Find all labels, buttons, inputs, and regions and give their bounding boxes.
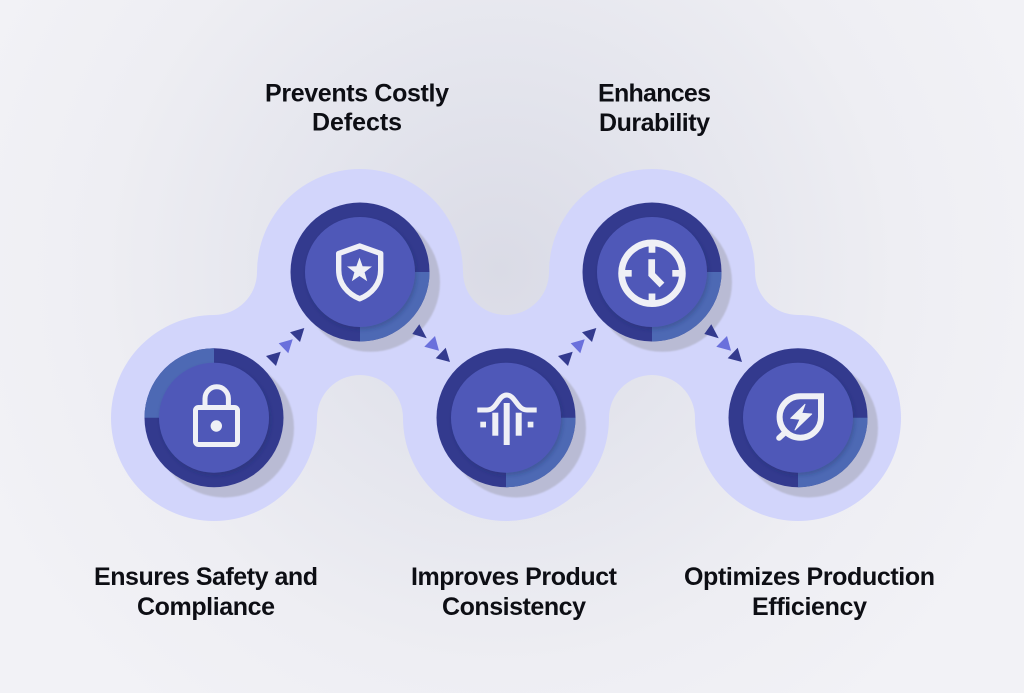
label: Ensures Safety and Compliance: Ensures Safety and: [94, 563, 318, 591]
label: Improves Product Consistency: [411, 563, 618, 621]
label: Prevents Costly Defects: [265, 80, 449, 136]
label: Enhances Durability: [598, 80, 711, 137]
icon: leaf with bolt: [779, 396, 821, 438]
label: Ensures Safety and Compliance: Compliance: [137, 593, 275, 621]
label: Enhances Durability: Enhances: [598, 80, 711, 108]
node 4: durability: [582, 202, 732, 352]
arrow: node 4 to node 5: [704, 324, 742, 362]
label: Optimizes Production Efficiency: Efficiency: [752, 593, 867, 621]
label: Optimizes Production Efficiency: Optimizes Production: [684, 563, 935, 591]
connected blob background: [111, 169, 901, 521]
node 5: production efficiency: [728, 348, 878, 498]
node 3: product consistency: [436, 348, 586, 498]
icon: clock: [622, 243, 682, 304]
icon: shield with star: [339, 246, 381, 299]
label: Optimizes Production Efficiency: [684, 563, 935, 621]
arrow: node 1 to node 2: [266, 328, 304, 366]
label: Prevents Costly Defects: Prevents Costly: [265, 80, 449, 108]
label: Enhances Durability: Durability: [599, 109, 710, 137]
node 2: prevents defects: [290, 202, 440, 352]
label: Ensures Safety and Compliance: [94, 563, 318, 621]
icon: padlock: [196, 387, 238, 444]
arrow: node 3 to node 4: [558, 328, 596, 366]
label: Improves Product Consistency: Improves Product: [411, 563, 618, 591]
label: Improves Product Consistency: Consistency: [442, 593, 586, 621]
label: Prevents Costly Defects: Defects: [312, 108, 402, 136]
node 1: safety and compliance: [144, 348, 294, 498]
arrow: node 2 to node 3: [412, 324, 450, 362]
icon: signal curve and bars: [477, 395, 537, 445]
